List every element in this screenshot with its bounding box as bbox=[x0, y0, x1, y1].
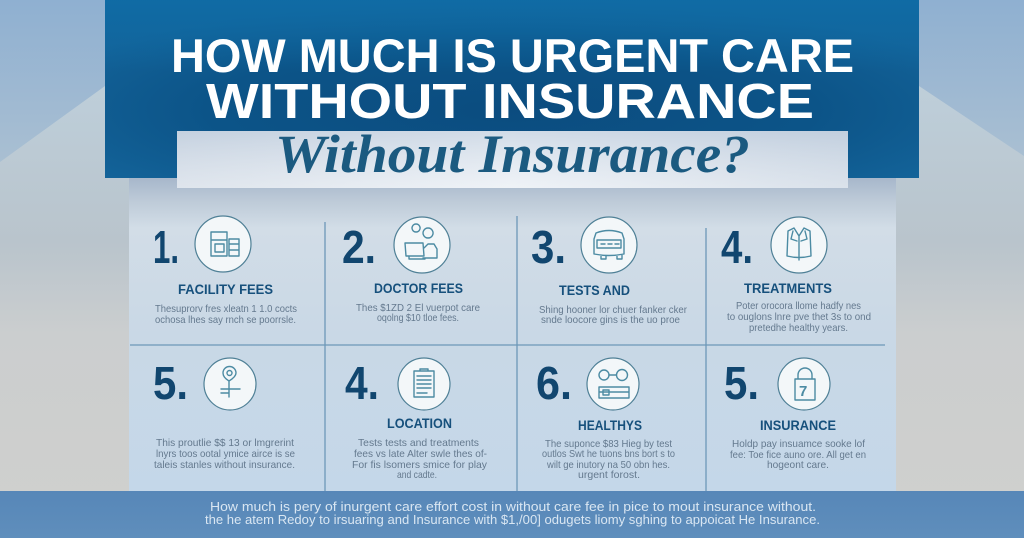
description: Shing hooner lor chuer fanker cker bbox=[539, 304, 687, 316]
description: lnyrs toos ootal ymice airce is se bbox=[156, 448, 295, 460]
description bbox=[155, 303, 297, 326]
icon: vehicle front bbox=[581, 217, 637, 273]
number 4: 4. bbox=[721, 221, 753, 273]
header banner bbox=[105, 0, 919, 178]
description: taleis stanles without insurance. bbox=[154, 459, 295, 471]
icon: doctor and patient bbox=[394, 217, 450, 273]
icon: facility machine bbox=[195, 216, 251, 272]
number 5: 5. bbox=[153, 357, 188, 409]
grid lines bbox=[130, 216, 885, 491]
description: Tests tests and treatments bbox=[358, 437, 479, 449]
description: fees vs late Alter swle thes of- bbox=[354, 448, 487, 460]
heading: DOCTOR FEES bbox=[374, 281, 463, 296]
icon: padlock bbox=[778, 358, 830, 410]
heading: INSURANCE bbox=[760, 418, 836, 433]
description: This proutlie $$ 13 or lmgrerint bbox=[156, 437, 294, 449]
footer text: the he atem Redoy to irsuaring and Insurance with $1,/00] odugets liomy sghing to appoicat He Insurance. bbox=[205, 513, 820, 527]
number 3: 3. bbox=[531, 221, 566, 273]
description: ochosa lhes say rnch se poorrsle. bbox=[155, 314, 296, 326]
panel: treatments bbox=[721, 217, 871, 334]
footer text bbox=[205, 500, 820, 527]
description: For fis lsomers smice for play bbox=[352, 459, 488, 471]
icon: clipboard bbox=[398, 358, 450, 410]
footer text: How much is pery of inurgent care effort cost in without care fee in pice to mout insurance without. bbox=[210, 500, 816, 514]
subtitle ribbon bbox=[177, 124, 848, 188]
icon: padlock: 7 bbox=[799, 383, 807, 400]
description: The suponce $83 Hieg by test bbox=[545, 438, 672, 450]
panel: insurance bbox=[724, 357, 866, 471]
description: fee: Toe fice auno ore. All get en bbox=[730, 449, 866, 461]
description bbox=[727, 300, 871, 334]
description: outlos Swt he tuons bns bort s to bbox=[542, 448, 675, 460]
title bbox=[171, 29, 854, 129]
title: WITHOUT INSURANCE bbox=[206, 75, 814, 129]
description: to ouglons lnre pve thet 3s to ond bbox=[727, 311, 871, 323]
panel: healthys bbox=[536, 357, 675, 481]
description: snde loocore gins is the uo proe bbox=[541, 314, 680, 326]
description: Thesuprorv fres xleatn 1 1.0 cocts bbox=[155, 303, 297, 315]
description bbox=[539, 304, 687, 326]
heading: LOCATION bbox=[387, 416, 452, 431]
description bbox=[154, 437, 295, 471]
description: and cadte. bbox=[397, 469, 437, 481]
panel: location bbox=[345, 357, 488, 481]
description: pretedhe healthy years. bbox=[749, 322, 848, 334]
description bbox=[730, 438, 866, 471]
footer band bbox=[0, 491, 1024, 538]
icon: coins and card bbox=[587, 358, 639, 410]
heading: TESTS AND bbox=[559, 283, 630, 298]
description: wilt ge inutory na 50 obn hes. bbox=[546, 459, 670, 471]
heading: HEALTHYS bbox=[578, 418, 642, 433]
description: hogeont care. bbox=[767, 459, 829, 471]
number 6: 6. bbox=[536, 357, 572, 409]
panel: facility fees bbox=[153, 216, 297, 326]
title: HOW MUCH IS URGENT CARE bbox=[171, 29, 854, 82]
description: Thes $1ZD 2 El vuerpot care bbox=[356, 302, 480, 314]
description bbox=[352, 437, 488, 481]
content panel bbox=[129, 178, 896, 491]
description: urgent forost. bbox=[578, 469, 640, 481]
number 2: 2. bbox=[342, 221, 376, 273]
number 5: 5. bbox=[724, 357, 759, 409]
description bbox=[542, 438, 675, 481]
number 4: 4. bbox=[345, 357, 379, 409]
heading: FACILITY FEES bbox=[178, 282, 273, 297]
icon: location key bbox=[204, 358, 256, 410]
panel: tests and bbox=[531, 217, 687, 326]
description: Holdp pay insuamce sooke lof bbox=[732, 438, 865, 450]
heading: TREATMENTS bbox=[744, 281, 832, 296]
panel: cost details bbox=[153, 357, 295, 471]
subtitle ribbon: Without Insurance? bbox=[275, 124, 750, 184]
number 1: 1. bbox=[153, 221, 179, 273]
icon: medical coat bbox=[771, 217, 827, 273]
panel: doctor fees bbox=[342, 217, 480, 324]
description: Poter orocora llome hadfy nes bbox=[736, 300, 861, 312]
description: oqolng $10 tloe fees. bbox=[377, 312, 459, 324]
description bbox=[356, 302, 480, 324]
